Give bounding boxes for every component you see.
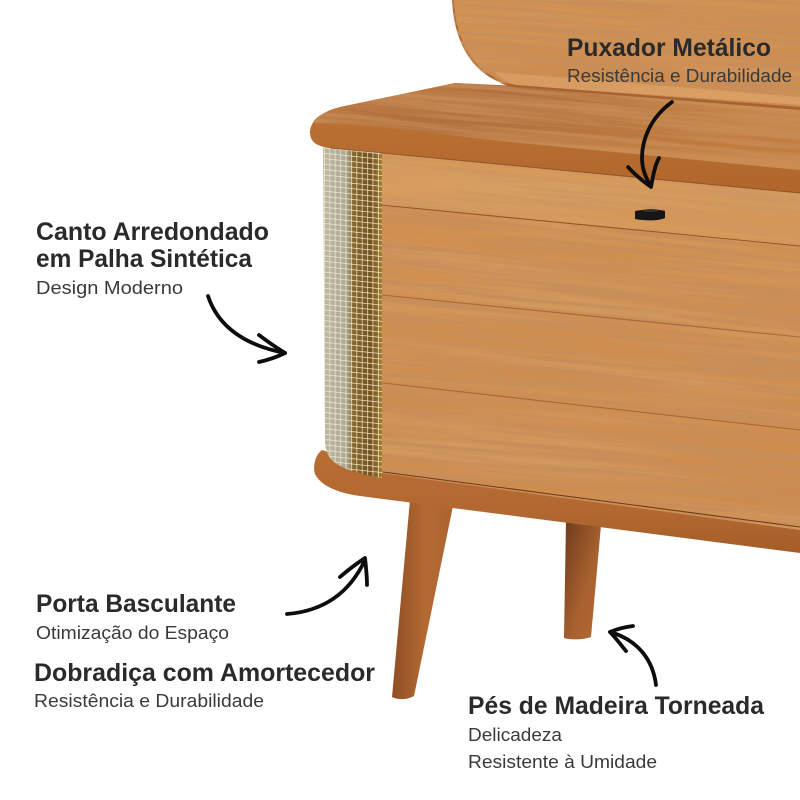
front panel [380, 152, 800, 530]
metal handle [635, 209, 665, 220]
callout: Porta Basculante: Porta Basculante [36, 590, 236, 618]
table top [310, 83, 800, 194]
callout: Pés de Madeira Torneada: Delicadeza [468, 725, 563, 745]
callout: Dobradiça com Amortecedor: Resistência e Durabilidade [34, 691, 264, 711]
arrow: to door [287, 558, 367, 614]
callout: Porta Basculante [36, 590, 236, 643]
callout: Canto Arredondado: Design Moderno [36, 278, 183, 298]
arrow: to handle [628, 102, 672, 187]
callout: Pés de Madeira Torneada: Resistente à Umidade [468, 752, 657, 772]
callout: Pés de Madeira Torneada: Pés de Madeira Torneada [468, 692, 765, 720]
callout: Pés de Madeira Torneada [468, 692, 765, 772]
callout: Puxador Metálico: Puxador Metálico [567, 34, 771, 62]
callout: Canto Arredondado [36, 218, 269, 298]
back panel lower edge [500, 83, 800, 110]
front leg [392, 500, 453, 699]
callout: Canto Arredondado: em Palha Sintética [36, 245, 253, 273]
callout: Dobradiça com Amortecedor: Dobradiça com Amortecedor [34, 659, 375, 687]
back panel [452, 0, 800, 105]
callout: Puxador Metálico [567, 34, 792, 86]
base plinth [314, 450, 800, 553]
arrow: to cane corner [208, 296, 285, 362]
arrow: to leg [610, 626, 656, 685]
callout: Porta Basculante: Otimização do Espaço [36, 623, 229, 643]
callout: Dobradiça com Amortecedor [34, 659, 375, 711]
synthetic cane corner [323, 145, 382, 478]
drawer strip [380, 150, 800, 247]
back leg [564, 520, 601, 639]
callout: Canto Arredondado: Canto Arredondado [36, 218, 269, 246]
callout: Puxador Metálico: Resistência e Durabilidade [567, 66, 792, 86]
